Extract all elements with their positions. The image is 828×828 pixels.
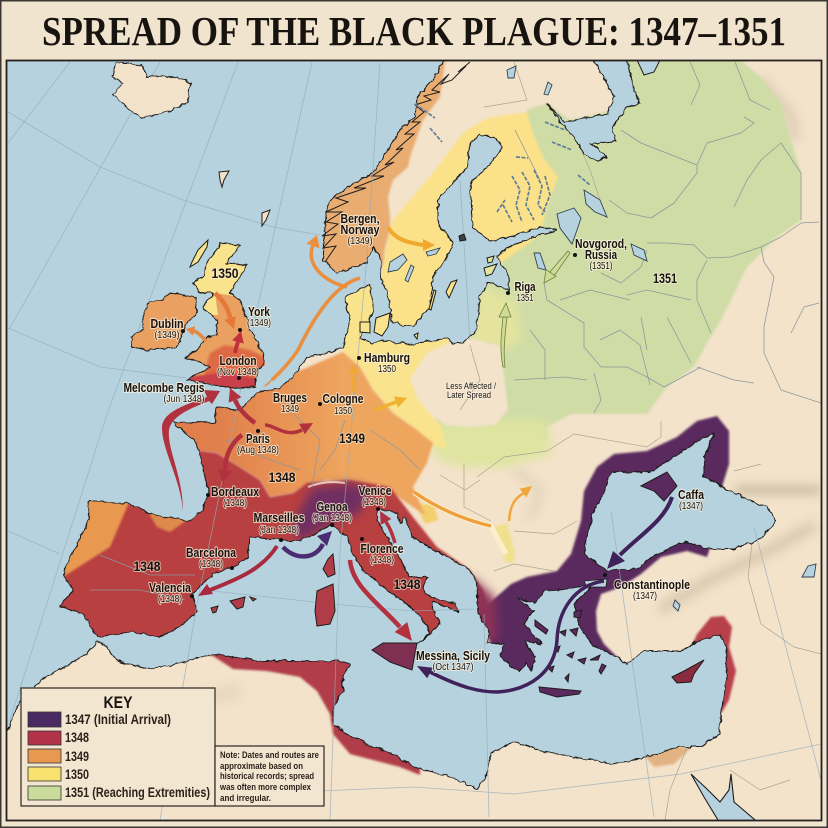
Sicily: [372, 643, 417, 670]
Denmark islands: [360, 313, 418, 339]
label: Messina: (Oct 1347): [432, 662, 474, 673]
label: Riga: [514, 280, 536, 304]
arrow: to Riga: [499, 303, 511, 367]
region: North Africa 1348: [207, 654, 422, 776]
label: Novgorod: Russia: [585, 248, 618, 262]
sea: Red Sea: [690, 774, 756, 820]
label: Barcelona: Barcelona: [186, 546, 237, 560]
region: Iberia and Italy 1348: [60, 450, 485, 637]
Finnish lakes: [415, 104, 590, 222]
arrow: Wales to Dublin: [186, 326, 206, 341]
label: Valencia: [149, 581, 192, 605]
Aegean islands: [535, 610, 600, 682]
label: Cologne: 1350: [334, 406, 352, 417]
label: Bergen: Norway: [340, 223, 380, 237]
arrow: to Hamburg: [348, 363, 360, 392]
label: London: London: [220, 354, 256, 368]
label: Paris: [237, 432, 279, 456]
Saaremaa: [484, 264, 497, 276]
region: France and Germany 1349: [165, 352, 433, 515]
label: 1350 Scotland: 1350: [212, 265, 239, 281]
region: Black Sea and Greece 1347: [480, 416, 729, 680]
sea: White Sea: [547, 52, 639, 161]
label: Bergen: [340, 212, 380, 247]
arrow: Paris to London: [229, 388, 255, 423]
arrow: Marseilles to Genoa: [283, 531, 332, 556]
label: London: [217, 354, 259, 378]
region: Egypt: [644, 745, 691, 767]
arrow: Adriatic to Venice: [380, 511, 395, 543]
panel: note: [215, 746, 324, 806]
Sardinia: [315, 584, 335, 626]
label: Marseilles: [254, 511, 305, 536]
region: Norway 1349: [323, 61, 446, 273]
label: Bruges: [273, 391, 307, 415]
label: Dublin: Dublin: [150, 317, 184, 331]
label: Novgorod: (1351): [590, 261, 612, 272]
label: Marseilles: (Jan 1348): [259, 525, 299, 536]
label: Barcelona: [186, 546, 237, 570]
arrow: London to York: [232, 331, 244, 353]
island: Faroe: [219, 171, 229, 187]
swatch 1351: [28, 786, 61, 800]
text 1347: 1347 (Initial Arrival): [65, 712, 171, 727]
note text: [219, 750, 319, 804]
Rhodes: [599, 664, 606, 674]
label: Bordeaux: Bordeaux: [211, 485, 259, 499]
Cyprus: [672, 660, 704, 683]
note text: Note: Dates and routes are: [220, 750, 319, 761]
text 1350: 1350: [65, 767, 89, 782]
key box: [21, 688, 215, 806]
island: Hebrides: [190, 240, 208, 267]
label: Marseilles: Marseilles: [254, 511, 305, 525]
arrow: Caffa to Constantinople: [607, 497, 672, 569]
Britain base: [185, 243, 265, 388]
Oland: [429, 290, 436, 310]
note box: [215, 746, 324, 806]
Gotland: [446, 280, 457, 298]
label: Bergen: (1349): [348, 236, 372, 247]
terrain shading: [216, 78, 820, 701]
label: Bergen: Bergen,: [340, 212, 380, 226]
region: Balkan fade: [470, 575, 498, 640]
label: Bruges: 1349: [281, 404, 299, 415]
label: Constantinople: [614, 578, 690, 602]
label: 1348 Italy: 1348: [394, 576, 421, 592]
label: Hamburg: [364, 351, 410, 375]
arrow: Alps to Balkans: [414, 492, 506, 554]
label: Melcombe Regis: [124, 381, 205, 405]
label: Genoa: (Jan 1348): [312, 513, 352, 524]
label: Constantinople: Constantinople: [614, 578, 690, 592]
swatch 1348: [28, 731, 61, 745]
label: Barcelona: (1348): [199, 559, 223, 570]
label: Valencia: (1348): [158, 594, 182, 605]
region: Basque 1349: [148, 514, 186, 533]
other islands: [211, 234, 704, 697]
arrow: Norway to Sweden: [388, 227, 435, 251]
label: Melcombe Regis: Melcombe Regis: [124, 381, 205, 395]
label: Bruges: Bruges: [273, 391, 307, 405]
sea: Atlantic, North Sea, Baltic and Mediterranean: [0, 52, 727, 789]
arrow: Melcombe Regis: [162, 390, 220, 512]
region: Alpine snow line: [308, 482, 345, 487]
label: Messina: [416, 649, 490, 673]
label: Messina: Messina, Sicily: [416, 649, 490, 663]
label: 1351 Russia: 1351: [653, 270, 677, 286]
text 1351: 1351 (Reaching Extremities): [65, 785, 210, 800]
arrow: Italy to Sicily: [350, 560, 412, 641]
label: Caffa: (1347): [679, 501, 703, 512]
label: Venice: (1348): [362, 497, 386, 508]
region: Baltic transition: [470, 285, 522, 350]
Corsica: [323, 554, 335, 577]
islands: [113, 63, 270, 350]
swatch 1349: [28, 749, 61, 763]
note text: and irregular.: [220, 793, 271, 804]
Balearics: [211, 597, 256, 613]
sea: Marmara: [584, 579, 607, 587]
label: Constantinople: (1347): [633, 591, 657, 602]
arrow: Constantinople to Messina: [417, 581, 604, 692]
label: 1348 Spain: 1348: [134, 558, 161, 574]
region: Sweden and Finland 1350: [378, 112, 558, 345]
label: less affected: [446, 381, 496, 400]
label: Riga: 1351: [516, 293, 534, 304]
label: Novgorod: Novgorod,: [575, 237, 627, 251]
note text: approximate based on: [220, 761, 303, 772]
label: Florence: (1348): [370, 555, 394, 566]
plague regions: [40, 55, 801, 775]
label: less affected: Less Affected /: [446, 381, 496, 391]
key heading: KEY: [104, 693, 133, 712]
sea: Arctic bay: [637, 60, 660, 75]
region: Adriatic 1350: [415, 503, 438, 524]
label: Hamburg: 1350: [378, 364, 396, 375]
label: Venice: Venice: [358, 484, 392, 498]
panel: key: [21, 688, 215, 806]
arrow: to Novgorod: [544, 251, 570, 283]
region: central Europe transition: [425, 420, 552, 468]
label: York: (1349): [247, 318, 271, 329]
arrow: Paris to Bordeaux: [218, 435, 242, 483]
label: 1349 Germany: 1349: [339, 430, 365, 446]
label: Bordeaux: (1348): [223, 498, 247, 509]
Aland: [459, 234, 466, 241]
label: Bordeaux: [211, 485, 259, 509]
rivers and borders: [90, 62, 821, 600]
swatch 1350: [28, 767, 61, 781]
text 1349: 1349: [65, 749, 89, 764]
label: Florence: Florence: [360, 542, 404, 556]
note text: was often more complex: [219, 782, 312, 793]
label: Riga: Riga: [514, 280, 536, 294]
label: London: (Nov 1348): [217, 367, 259, 378]
label: York: [247, 305, 271, 329]
Britain regions: [180, 235, 270, 395]
region: north-west Iberia 1349: [64, 501, 130, 577]
note text: historical records; spread: [220, 771, 314, 782]
island: Shetland: [262, 210, 270, 226]
region: Germany 1350: [342, 286, 450, 450]
text 1348: 1348: [65, 730, 89, 745]
region: Balkan 1350: [492, 523, 515, 563]
arrow: Scotland to York: [215, 293, 236, 329]
Crete: [539, 687, 581, 697]
region: Alps 1347 patch: [292, 484, 372, 540]
label: Florence: [360, 542, 404, 566]
label: Cologne: [322, 392, 364, 417]
label: York: York: [248, 305, 270, 319]
region: Levant 1348: [690, 616, 736, 712]
island: Ireland: [131, 293, 197, 350]
Crimea: [641, 472, 677, 501]
land borders: [440, 62, 821, 820]
label: Valencia: Valencia: [149, 581, 192, 595]
label: Paris: (Aug 1348): [237, 445, 279, 456]
label: Hamburg: Hamburg: [364, 351, 410, 365]
label: Cologne: Cologne: [322, 392, 364, 406]
label: Caffa: Caffa: [678, 488, 705, 502]
label: less affected: Later Spread: [447, 390, 491, 400]
arrow: Marseilles to Valencia: [198, 546, 277, 596]
label: Caffa: [678, 488, 705, 512]
label: Dublin: [150, 317, 184, 341]
label: Melcombe Regis: (Jun 1348): [164, 394, 204, 405]
island: Iceland: [113, 63, 191, 118]
island: Great Britain: [180, 235, 270, 395]
Hiumaa: [487, 256, 494, 263]
sea: Black Sea: [584, 434, 776, 571]
label: Genoa: Genoa: [316, 500, 348, 514]
label: Venice: [358, 484, 392, 508]
swatch 1347: [28, 712, 61, 727]
fjords: [322, 62, 470, 262]
label: Novgorod: [575, 237, 627, 272]
label: Dublin: (1349): [154, 330, 180, 341]
city dots: [181, 253, 607, 598]
label: 1348 France: 1348: [268, 469, 296, 485]
label: Paris: Paris: [246, 432, 270, 446]
arrow: Paris east: [265, 423, 313, 434]
arrow: Low Countries and Norway route: [262, 235, 360, 388]
region: 1351: [420, 55, 801, 440]
arrow: Germany east: [375, 396, 407, 410]
region: less affected: [410, 338, 508, 427]
label: Genoa: [312, 500, 352, 524]
lakes: [388, 66, 816, 611]
Britain coast: [185, 243, 265, 388]
arrow: Balkans north: [509, 486, 532, 521]
